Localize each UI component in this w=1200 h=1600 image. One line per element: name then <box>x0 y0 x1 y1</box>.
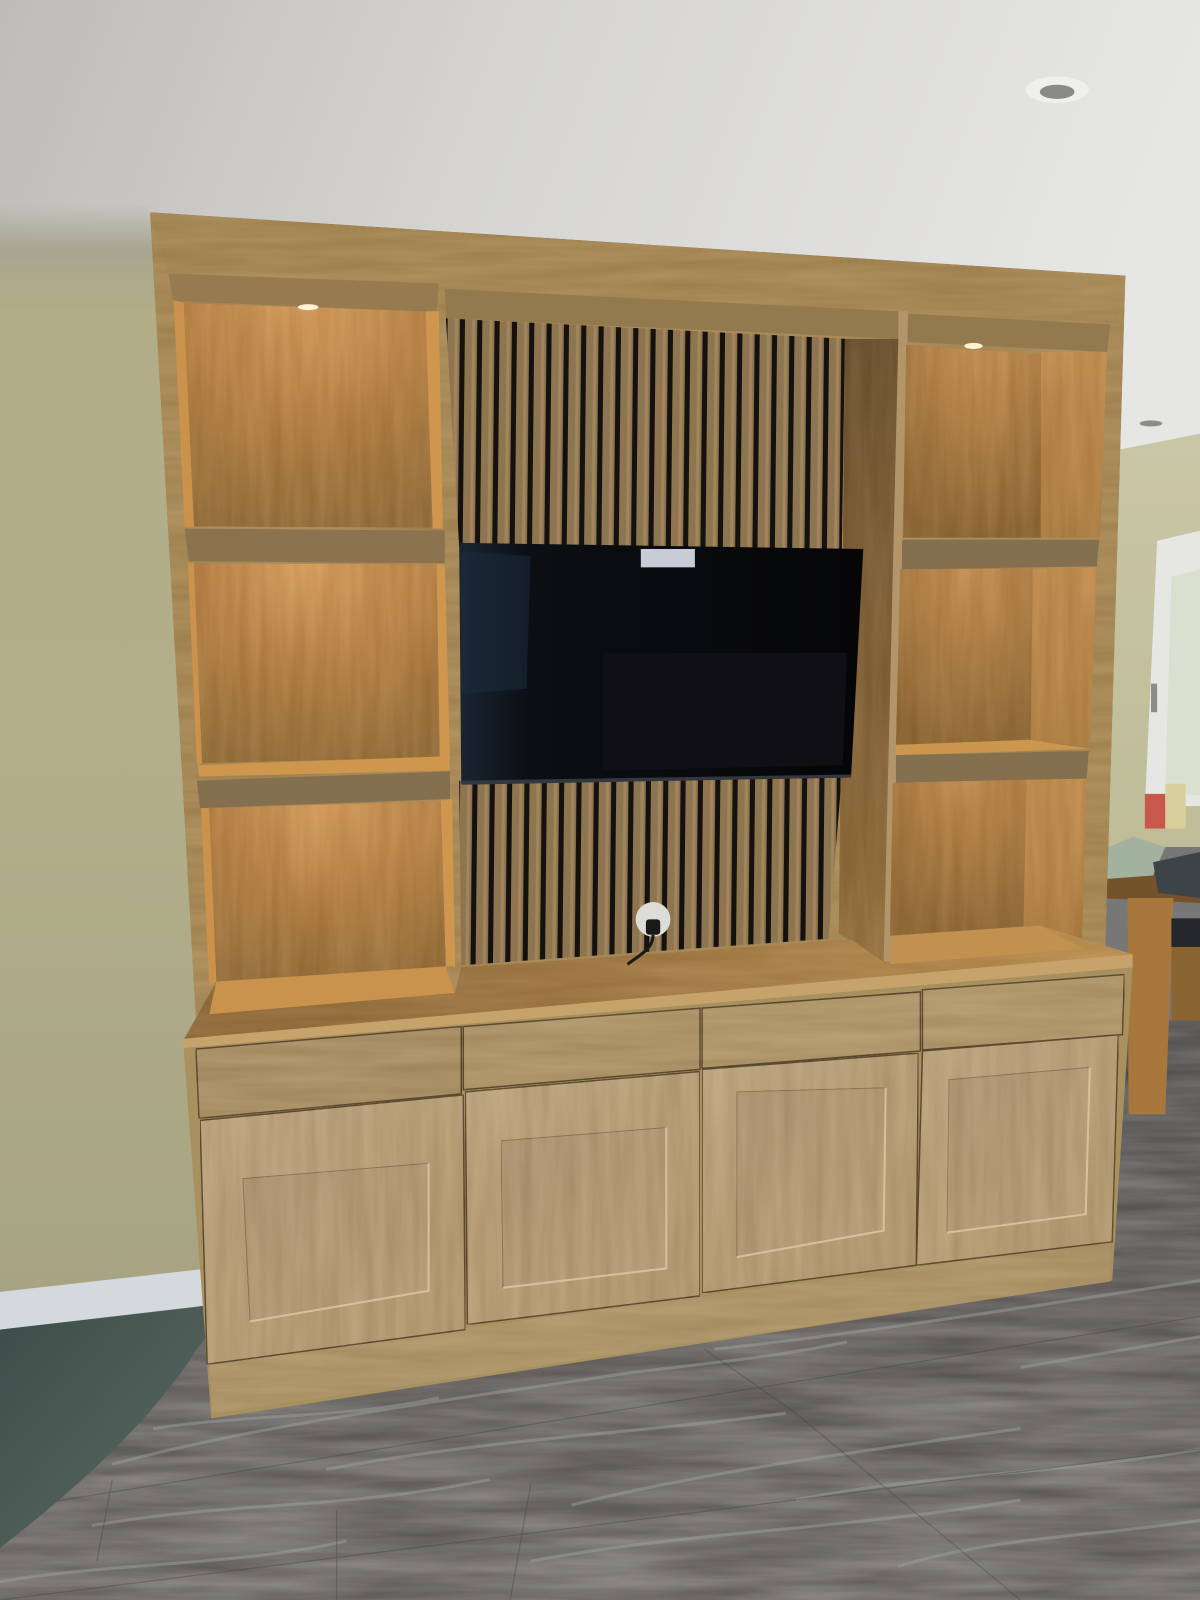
base cabinet carcass <box>184 967 1133 1418</box>
right bay 1 <box>903 343 1107 538</box>
skirting board <box>0 1268 209 1330</box>
door 4 <box>916 1035 1118 1265</box>
left bays <box>173 300 455 986</box>
slatted panel above TV <box>446 318 845 551</box>
worktop front edge <box>182 954 1133 1049</box>
door 2 <box>465 1071 700 1324</box>
left shelf 1 front <box>185 529 445 563</box>
slatted panel below TV <box>459 776 842 965</box>
ceiling <box>0 0 1200 469</box>
left bay 3 <box>201 799 455 986</box>
centre column <box>839 311 908 963</box>
lit ledge of left bay <box>209 966 455 1014</box>
floor <box>0 1020 1200 1600</box>
right bay 2 <box>896 567 1097 755</box>
lower fascia strips <box>168 273 1110 352</box>
top fascia <box>150 212 1122 339</box>
worktop surface <box>184 926 1133 1040</box>
left shelf 2 front <box>197 771 450 808</box>
left bay 1 <box>173 300 443 529</box>
door 1 <box>200 1095 465 1364</box>
television <box>459 543 863 785</box>
table and cloth at right <box>1098 784 1200 1114</box>
ceiling downlight <box>1026 77 1089 103</box>
small ceiling downlight <box>1140 420 1162 427</box>
upper carcass <box>150 212 1133 1041</box>
door 3 <box>702 1053 918 1293</box>
left bay 2 <box>188 562 450 777</box>
right bays <box>890 343 1107 949</box>
right wall with window <box>1097 434 1200 847</box>
right shelf 1 front <box>902 540 1099 569</box>
glass hearth <box>0 1305 214 1548</box>
left wall <box>0 204 219 1292</box>
kickboard <box>209 1241 1112 1414</box>
right bay 3 <box>890 779 1087 949</box>
TV sticker <box>641 549 695 567</box>
drawer fronts <box>196 974 1124 1118</box>
lit ledge of right bay <box>890 926 1084 964</box>
right shelf 2 front <box>896 751 1089 783</box>
socket and cable <box>628 902 670 964</box>
